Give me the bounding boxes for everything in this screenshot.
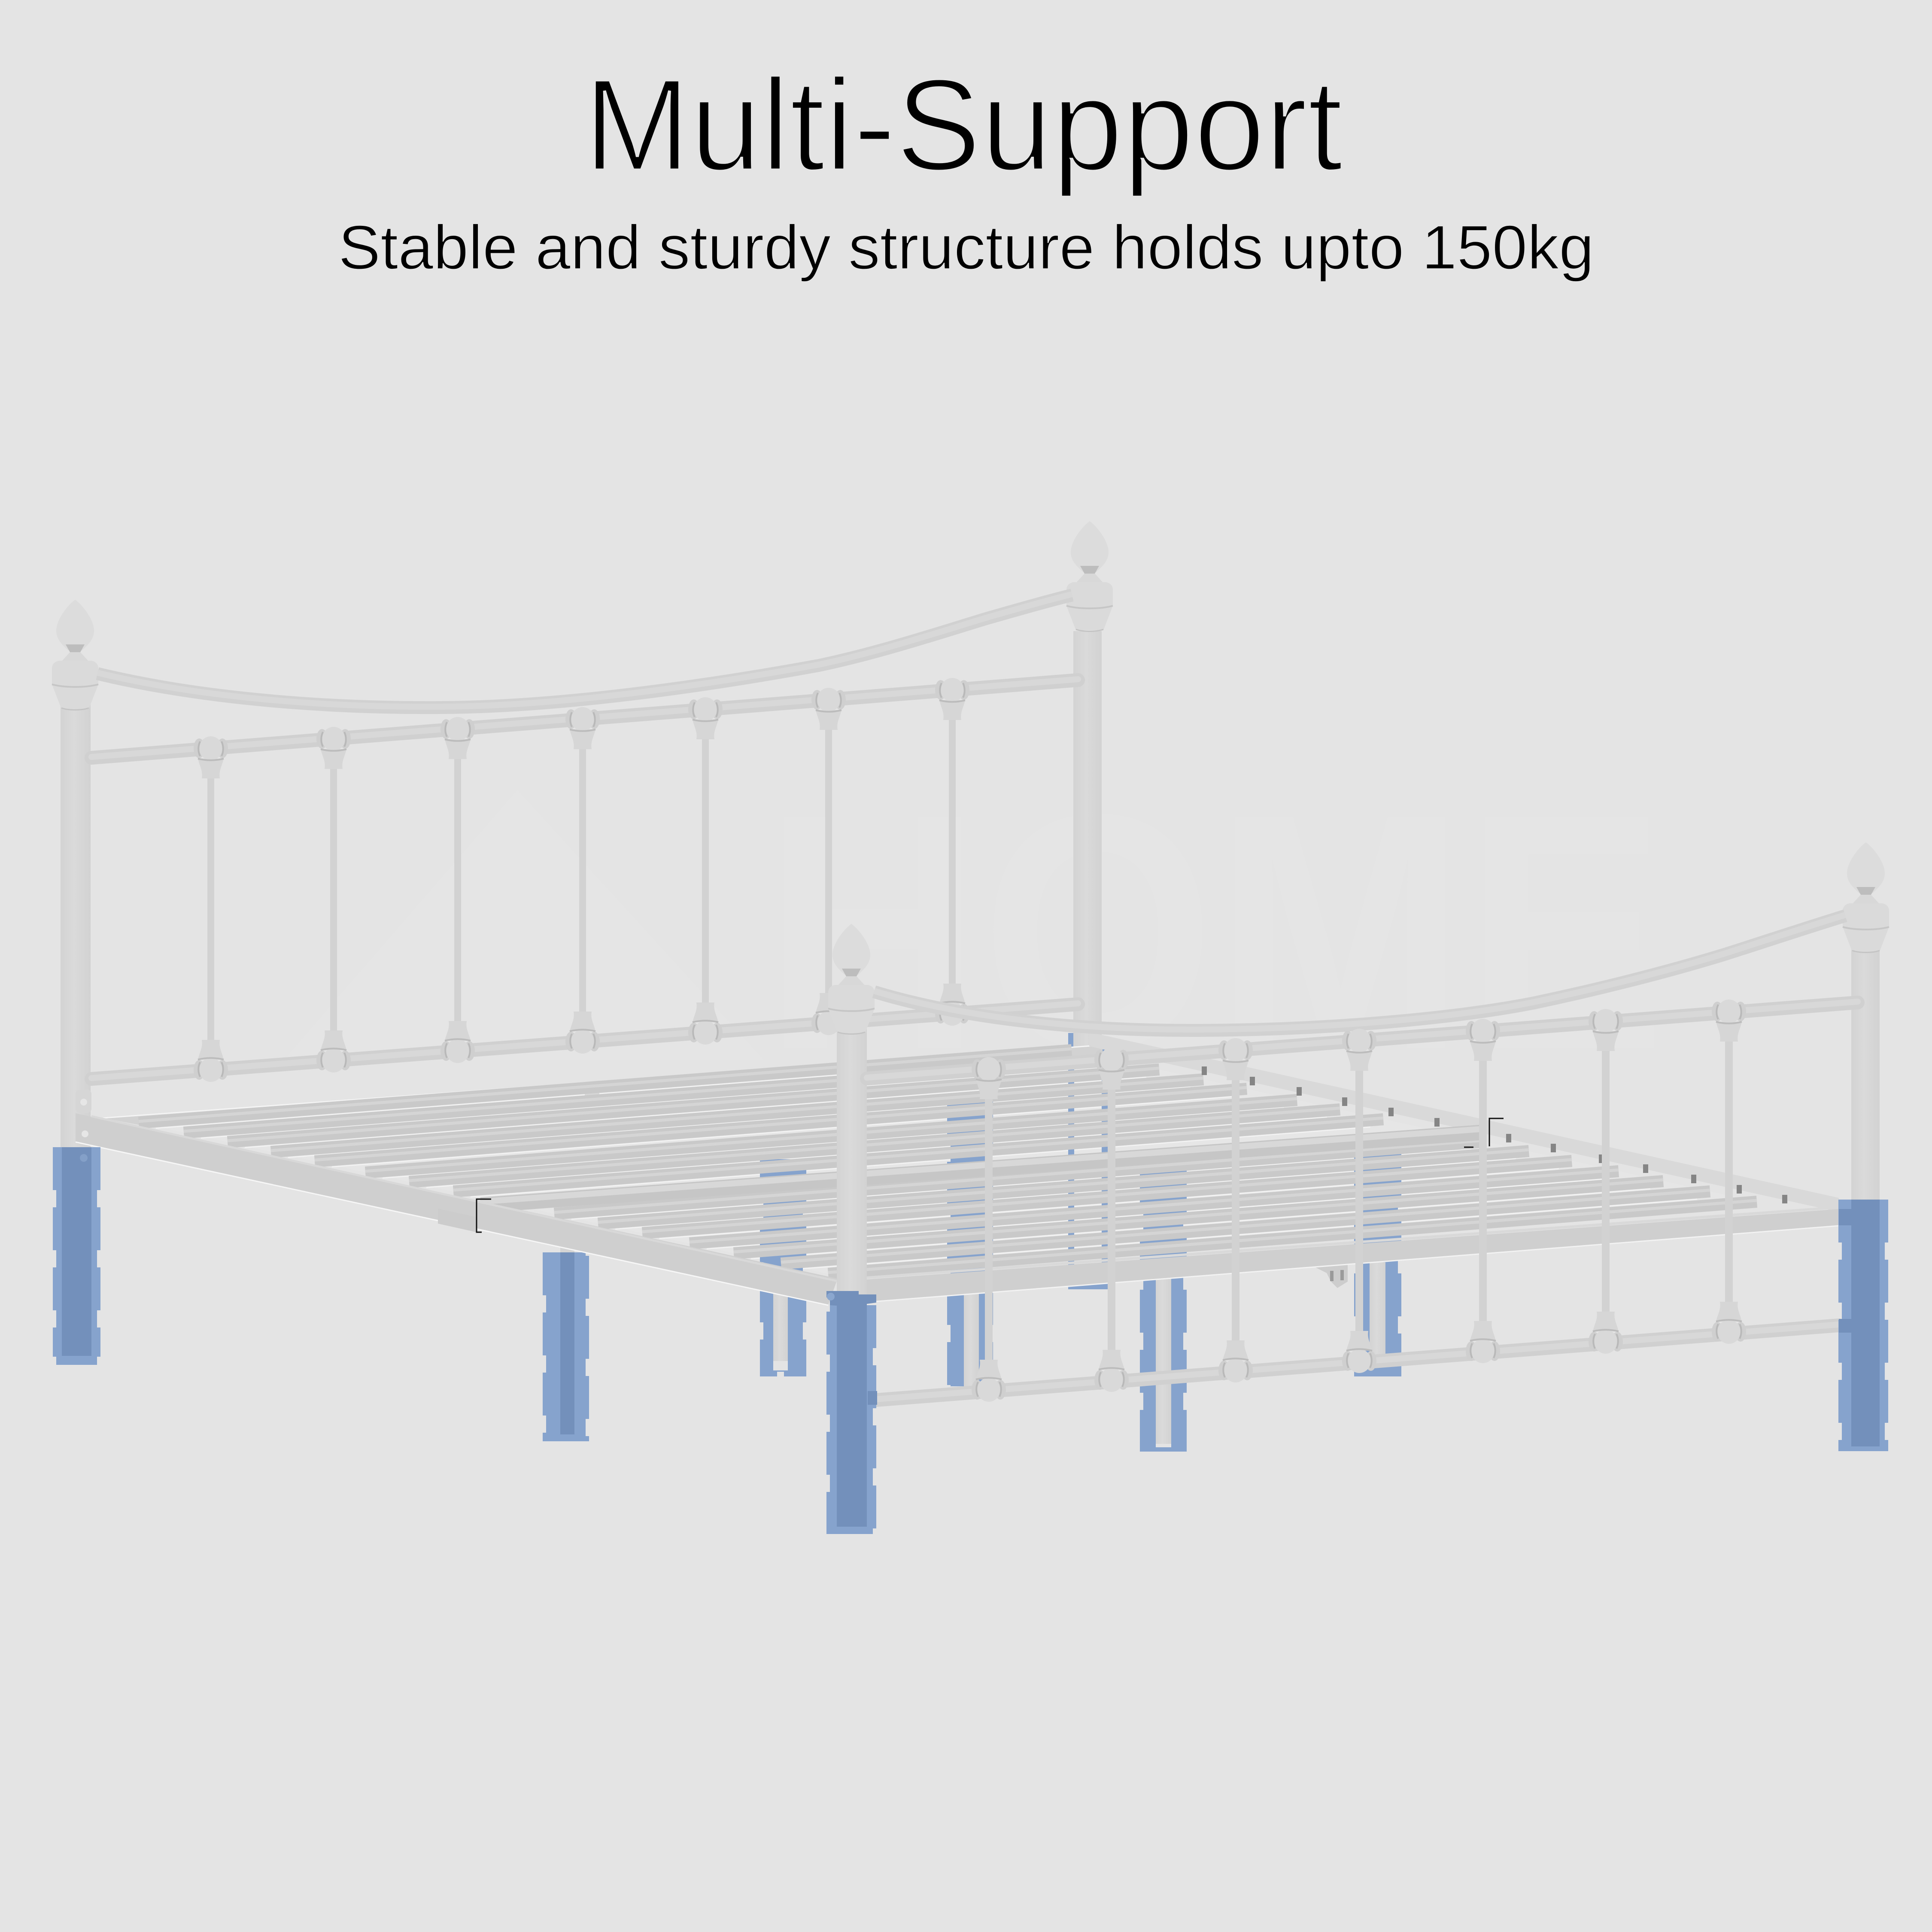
far side rail bbox=[1089, 1032, 1839, 1212]
center rail bbox=[481, 1129, 1485, 1205]
headboard left finial bbox=[52, 600, 98, 710]
pale deck seen between slats bbox=[139, 1050, 1757, 1274]
watermark bbox=[283, 745, 1666, 1119]
headboard knuckles bbox=[194, 678, 969, 1082]
footboard rails bbox=[867, 1002, 1858, 1400]
center underside bracket bbox=[1309, 1260, 1348, 1288]
footboard bbox=[828, 842, 1889, 1402]
bed frame bbox=[76, 1032, 1839, 1441]
back support legs highlighted in blue bbox=[762, 1033, 1400, 1452]
headboard curved top rail bbox=[97, 594, 1072, 708]
right foot leg bbox=[1839, 1200, 1886, 1451]
headboard right post bbox=[1073, 631, 1102, 1048]
footboard left finial bbox=[828, 924, 875, 1034]
footboard right finial bbox=[1843, 842, 1889, 952]
headboard spindles bbox=[211, 690, 952, 1070]
watermark: HOME bbox=[764, 745, 1666, 1119]
slats bbox=[139, 1049, 1757, 1274]
front support legs highlighted in blue bbox=[55, 1147, 1886, 1534]
bed illustration bbox=[52, 521, 1889, 1534]
footboard right post bbox=[1851, 945, 1880, 1202]
left foot leg bbox=[826, 1291, 877, 1534]
center leg under frame bbox=[544, 1241, 587, 1441]
foot rail bbox=[867, 1207, 1839, 1302]
footboard left post bbox=[837, 1026, 867, 1297]
subtitle: Stable and sturdy structure holds upto 150kg bbox=[338, 213, 1594, 282]
footboard knuckles bbox=[972, 999, 1746, 1402]
headboard rails bbox=[91, 679, 1078, 1079]
joint bracket marks bbox=[477, 1118, 1504, 1232]
headboard left post bbox=[61, 700, 91, 1155]
headboard right finial bbox=[1066, 521, 1113, 631]
head rail bracket bbox=[585, 1081, 599, 1100]
title: Multi-Support bbox=[584, 52, 1343, 199]
headboard bbox=[52, 521, 1113, 1155]
footboard curved top rail bbox=[874, 915, 1845, 1030]
slat end tabs bbox=[1202, 1066, 1787, 1203]
side rail joint sleeve bbox=[438, 1209, 477, 1232]
footboard spindles bbox=[989, 1012, 1729, 1390]
left head leg bbox=[55, 1147, 99, 1365]
head rail of frame bbox=[103, 1045, 1103, 1125]
near side rail bbox=[76, 1113, 838, 1305]
head corner plate and bolts bbox=[76, 1090, 91, 1137]
